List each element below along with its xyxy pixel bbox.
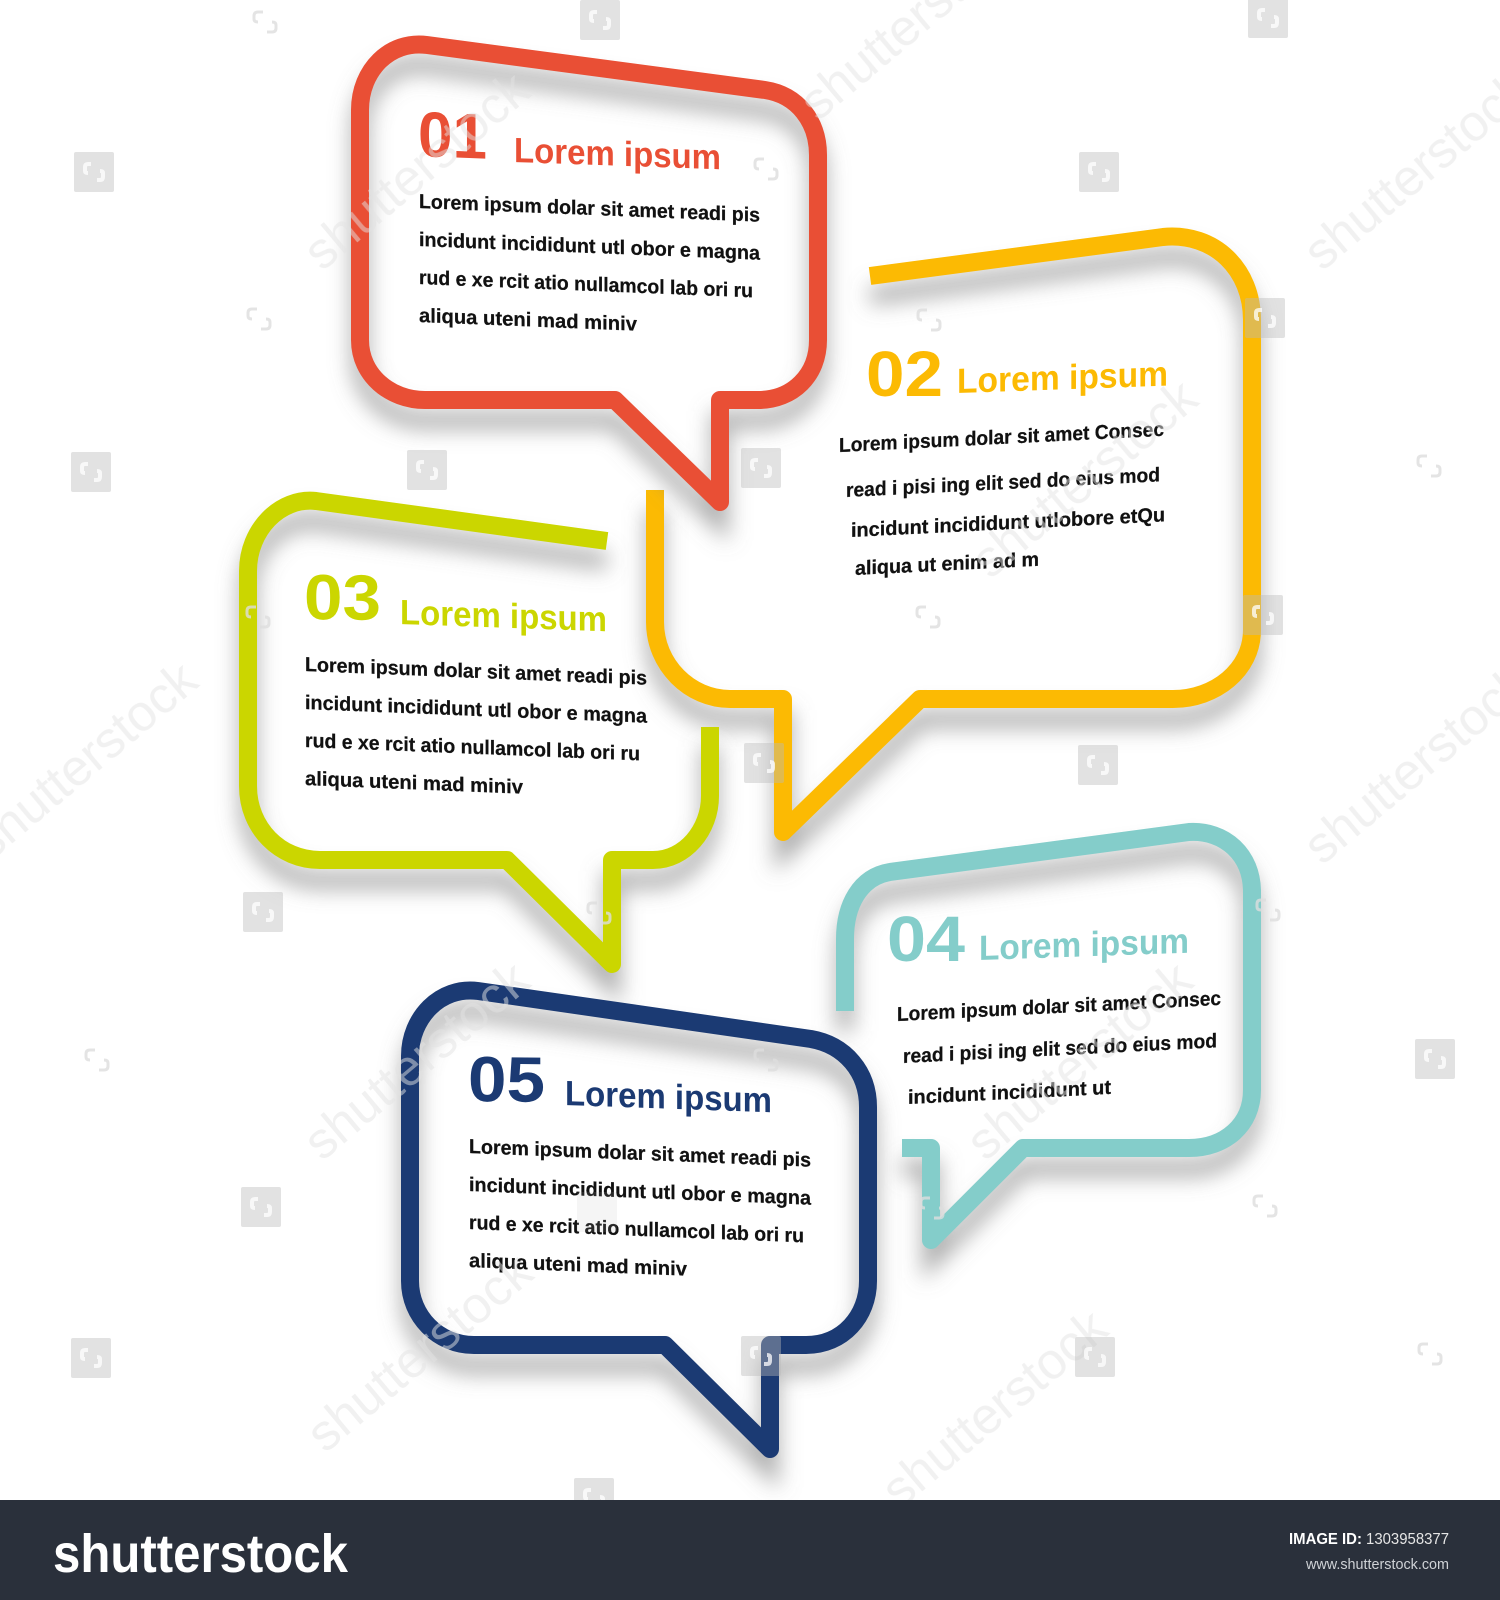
footer logo: shutterstock xyxy=(53,1524,349,1584)
text block 05: 05 xyxy=(468,1043,545,1116)
text block 01: 01 xyxy=(418,98,487,173)
text block 03: 03 xyxy=(304,561,381,634)
text block 05: incidunt incididunt utl obor e magna xyxy=(469,1174,812,1210)
text block 03: Lorem ipsum dolar sit amet readi pis xyxy=(305,654,647,690)
text block 01 xyxy=(418,98,761,336)
text block 01: incidunt incididunt utl obor e magna xyxy=(419,229,761,265)
watermark overlay: shutterstock xyxy=(292,60,540,280)
watermark overlay: shutterstock xyxy=(870,1298,1118,1518)
text block 05: Lorem ipsum dolar sit amet readi pis xyxy=(469,1136,811,1172)
text block 01: Lorem ipsum dolar sit amet readi pis xyxy=(419,191,760,227)
text block 04 xyxy=(887,903,1221,1109)
watermark overlay: shutterstock xyxy=(960,368,1208,588)
footer bar xyxy=(0,1500,1500,1600)
text block 05: aliqua uteni mad miniv xyxy=(469,1250,688,1281)
bubble 02: yellow outline xyxy=(655,237,1252,852)
text block 02: 02 xyxy=(866,338,943,410)
text block 05: rud e xe rcit atio nullamcol lab ori ru xyxy=(469,1212,804,1247)
footer image id: IMAGE ID: 1303958377 xyxy=(1289,1531,1449,1548)
text block 01: Lorem ipsum xyxy=(514,131,721,177)
text block 04: 04 xyxy=(887,903,965,975)
text block 01: aliqua uteni mad miniv xyxy=(419,305,638,336)
footer url: www.shutterstock.com xyxy=(1305,1557,1449,1573)
watermark overlay: shutterstock xyxy=(292,950,540,1170)
text block 02: Lorem ipsum xyxy=(957,355,1168,401)
text block 03: rud e xe rcit atio nullamcol lab ori ru xyxy=(305,730,640,765)
watermark overlay: shutterstock xyxy=(295,1242,543,1462)
watermark overlay: shutterstock xyxy=(955,950,1203,1170)
text block 01: rud e xe rcit atio nullamcol lab ori ru xyxy=(419,267,753,302)
bubble 03: lime outline xyxy=(248,501,710,984)
text block 04: incidunt incididunt ut xyxy=(908,1077,1111,1109)
text block 04: read i pisi ing elit sed do eius mod xyxy=(903,1030,1217,1068)
text block 02: read i pisi ing elit sed do eius mod xyxy=(846,464,1160,502)
text block 03: Lorem ipsum xyxy=(400,593,607,639)
bubble 05: navy outline xyxy=(410,990,868,1469)
text block 05 xyxy=(468,1043,812,1281)
text block 05: Lorem ipsum xyxy=(565,1074,772,1120)
text block 02: Lorem ipsum dolar sit amet Consec xyxy=(839,419,1164,457)
text block 03 xyxy=(304,561,648,799)
text block 03: aliqua uteni mad miniv xyxy=(305,768,524,799)
bubble 04: teal outline xyxy=(845,832,1252,1260)
text block 02: incidunt incididunt utlobore etQu xyxy=(851,504,1165,542)
text block 02: aliqua ut enim ad m xyxy=(855,549,1039,580)
text block 04: Lorem ipsum dolar sit amet Consec xyxy=(897,988,1221,1026)
bubble 01: red outline xyxy=(360,44,818,522)
text block 04: Lorem ipsum xyxy=(979,922,1189,968)
text block 02 xyxy=(839,338,1168,580)
text block 03: incidunt incididunt utl obor e magna xyxy=(305,692,648,728)
